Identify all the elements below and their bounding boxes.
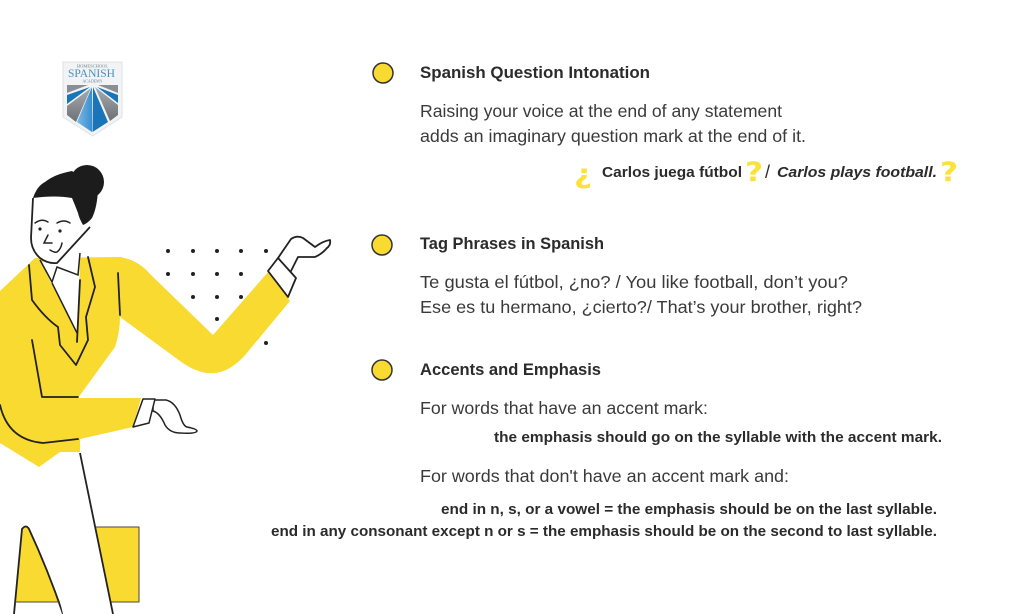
example sentence: / xyxy=(765,162,770,182)
logo: Homeschool Spanish Academy shield: ACADEMY xyxy=(82,78,103,84)
heading 2: Tag Phrases in Spanish xyxy=(420,234,604,253)
body text 1: Raising your voice at the end of any statement xyxy=(420,101,782,121)
figure: lower hand and cuff xyxy=(133,399,197,433)
section 1: Spanish Question Intonation xyxy=(373,63,958,190)
body text 3: For words that have an accent mark: xyxy=(420,398,708,418)
logo: Homeschool Spanish Academy shield: SPANISH xyxy=(68,68,115,80)
example sentence: Carlos plays football. xyxy=(777,165,937,181)
figure: hair xyxy=(33,165,104,225)
figure: shirt and collar xyxy=(40,253,80,335)
body text 2: Ese es tu hermano, ¿cierto?/ That’s your brother, right? xyxy=(420,297,862,317)
bullet 2 xyxy=(372,235,392,255)
body text 1 xyxy=(420,101,806,146)
body text 2 xyxy=(420,272,862,317)
figure: head and face xyxy=(31,165,104,263)
heading 1: Spanish Question Intonation xyxy=(420,63,650,82)
heading 3: Accents and Emphasis xyxy=(420,360,601,379)
figure: yellow jacket xyxy=(0,257,290,467)
body text 2: Te gusta el fútbol, ¿no? / You like football, don’t you? xyxy=(420,272,848,292)
figure: white trouser area xyxy=(39,452,113,614)
section 3: Accents and Emphasis xyxy=(271,360,942,540)
figure: jacket lapels and seam lines xyxy=(0,257,120,443)
body text 3: end in n, s, or a vowel = the emphasis should be on the last syllable. xyxy=(441,502,937,518)
body text 3 xyxy=(271,398,942,540)
body text 1: adds an imaginary question mark at the end of it. xyxy=(420,126,806,146)
logo: Homeschool Spanish Academy shield: HOMESCHOOL xyxy=(77,64,108,68)
dot grid xyxy=(166,249,268,345)
decorative square behind figure xyxy=(95,527,139,602)
example sentence: ? xyxy=(940,157,958,188)
figure: raised hand and cuff xyxy=(268,237,330,297)
logo: Homeschool Spanish Academy shield xyxy=(63,62,122,136)
example sentence: ? xyxy=(745,157,763,188)
example sentence: ¿ xyxy=(574,159,592,190)
section 2: Tag Phrases in Spanish xyxy=(372,234,862,317)
bullet 1 xyxy=(373,63,393,83)
figure: left trouser leg xyxy=(14,526,63,614)
body text 3: end in any consonant except n or s = the emphasis should be on the second to last syllable. xyxy=(271,524,937,540)
body text 3: For words that don't have an accent mark and: xyxy=(420,466,789,486)
bullet 3 xyxy=(372,360,392,380)
body text 3: the emphasis should go on the syllable with the accent mark. xyxy=(494,430,942,446)
example sentence: Carlos juega fútbol xyxy=(602,165,742,181)
example sentence xyxy=(574,157,958,190)
